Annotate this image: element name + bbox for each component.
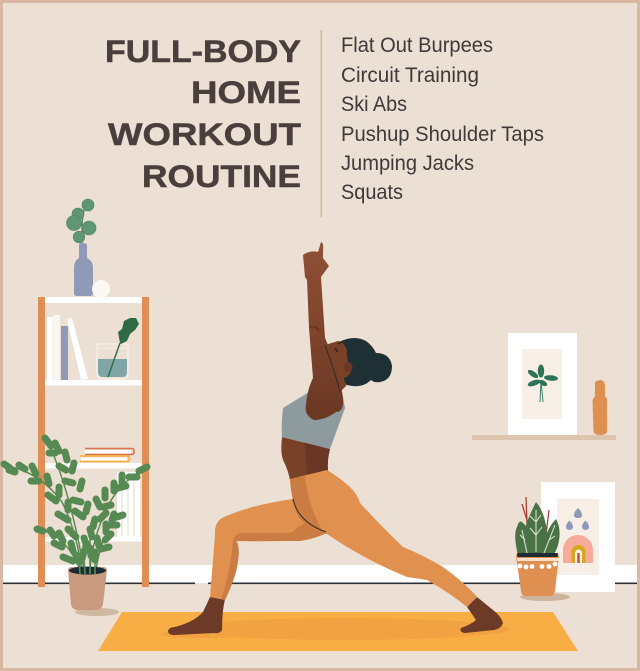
title: WORKOUT	[108, 116, 301, 152]
divider	[320, 30, 322, 217]
exercise list: Jumping Jacks	[341, 152, 474, 175]
books behind shelf bottom	[117, 472, 140, 537]
glass with sprig	[97, 318, 139, 379]
back foot	[460, 597, 503, 633]
bookshelf	[38, 297, 149, 587]
torso	[281, 437, 330, 480]
sports top	[282, 392, 345, 449]
front foot	[168, 597, 225, 635]
framed leaf picture	[508, 333, 577, 435]
exercise list: Squats	[341, 181, 403, 204]
elbow crease	[310, 326, 319, 331]
woman in yoga pose	[168, 242, 503, 635]
neck line	[325, 345, 340, 392]
exercise list: Flat Out Burpees	[341, 34, 493, 57]
exercise list: Pushup Shoulder Taps	[341, 123, 544, 146]
potted plant left	[4, 438, 147, 616]
eyebrow and eye	[335, 342, 342, 352]
title: ROUTINE	[142, 158, 301, 194]
title	[105, 33, 301, 194]
orange bottle	[592, 380, 607, 435]
potted plant right	[515, 497, 570, 601]
title: HOME	[191, 74, 301, 110]
wall shelf right	[472, 435, 616, 440]
framed rainbow picture	[541, 482, 615, 592]
groin line	[293, 499, 326, 532]
exercise list: Ski Abs	[341, 93, 407, 116]
baseboard	[3, 565, 637, 584]
title: FULL-BODY	[105, 33, 301, 69]
exercise list	[341, 34, 544, 204]
neck and face	[325, 341, 352, 392]
yoga mat	[98, 612, 578, 651]
hair	[341, 338, 392, 386]
vase with eucalyptus	[66, 199, 110, 298]
books on upper shelf	[47, 315, 88, 380]
exercise list: Circuit Training	[341, 64, 479, 87]
stacked books	[80, 448, 134, 462]
raised arm	[303, 242, 343, 420]
back leg with hip	[290, 470, 477, 607]
ear	[344, 362, 352, 372]
bent front leg	[210, 499, 328, 600]
